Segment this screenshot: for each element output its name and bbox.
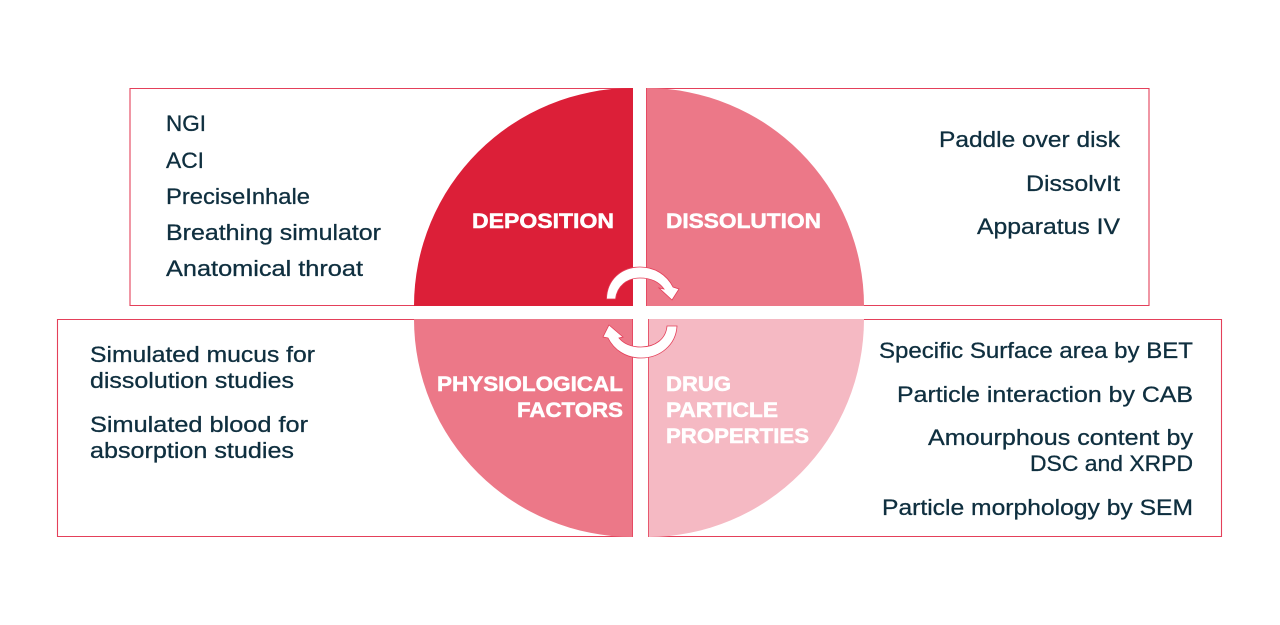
quadrant: dissolution	[646, 88, 864, 306]
text block: physiological factors: Simulated blood for	[90, 412, 308, 437]
quadrant edge lines	[632, 88, 648, 537]
heading: deposition: DEPOSITION	[472, 210, 614, 233]
text block: drug particle properties: Particle morphology by SEM	[882, 495, 1193, 520]
text block: deposition methods: NGI	[166, 111, 206, 136]
text block: drug particle properties: Specific Surface area by BET	[879, 338, 1193, 363]
text block: dissolution methods: Paddle over disk	[939, 127, 1121, 152]
text block: physiological factors: absorption studies	[90, 438, 294, 463]
heading: drug particle properties: PROPERTIES	[666, 425, 809, 448]
text block: dissolution methods	[939, 127, 1121, 239]
quadrant: drug particle properties	[648, 319, 864, 537]
heading: drug particle properties: DRUG	[666, 373, 731, 396]
heading: physiological factors	[437, 373, 623, 422]
icon: cycle arrow bottom	[603, 325, 677, 358]
text block: physiological factors: dissolution studies	[90, 368, 294, 393]
panel: drug particle properties box	[648, 320, 1222, 536]
text block: drug particle properties: DSC and XRPD	[1030, 451, 1193, 476]
text block: physiological factors	[90, 342, 315, 463]
panel: physiological factors box	[58, 320, 633, 536]
text block: dissolution methods: Apparatus IV	[977, 214, 1120, 239]
panel: dissolution box	[646, 88, 1149, 306]
heading: dissolution: DISSOLUTION	[666, 210, 821, 233]
heading: drug particle properties: PARTICLE	[666, 399, 778, 422]
heading: physiological factors: FACTORS	[517, 399, 623, 422]
text block: physiological factors: Simulated mucus for	[90, 342, 315, 367]
text block: deposition methods: Anatomical throat	[166, 256, 363, 281]
icon: cycle arrow top	[606, 267, 679, 300]
panel: deposition box	[130, 88, 633, 306]
quadrant: deposition	[414, 88, 633, 306]
text block: drug particle properties: Particle interaction by CAB	[897, 382, 1193, 407]
text block: deposition methods: Breathing simulator	[166, 220, 381, 245]
text block: deposition methods: PreciseInhale	[166, 184, 310, 209]
text block: drug particle properties: Amourphous content by	[928, 425, 1193, 450]
text block: dissolution methods: DissolvIt	[1026, 171, 1120, 196]
heading: drug particle properties	[666, 373, 809, 448]
text block: drug particle properties	[879, 338, 1193, 520]
heading: physiological factors: PHYSIOLOGICAL	[437, 373, 623, 396]
text block: deposition methods: ACI	[166, 148, 204, 173]
quadrant: physiological factors	[414, 319, 633, 537]
text block: deposition methods	[166, 111, 381, 281]
